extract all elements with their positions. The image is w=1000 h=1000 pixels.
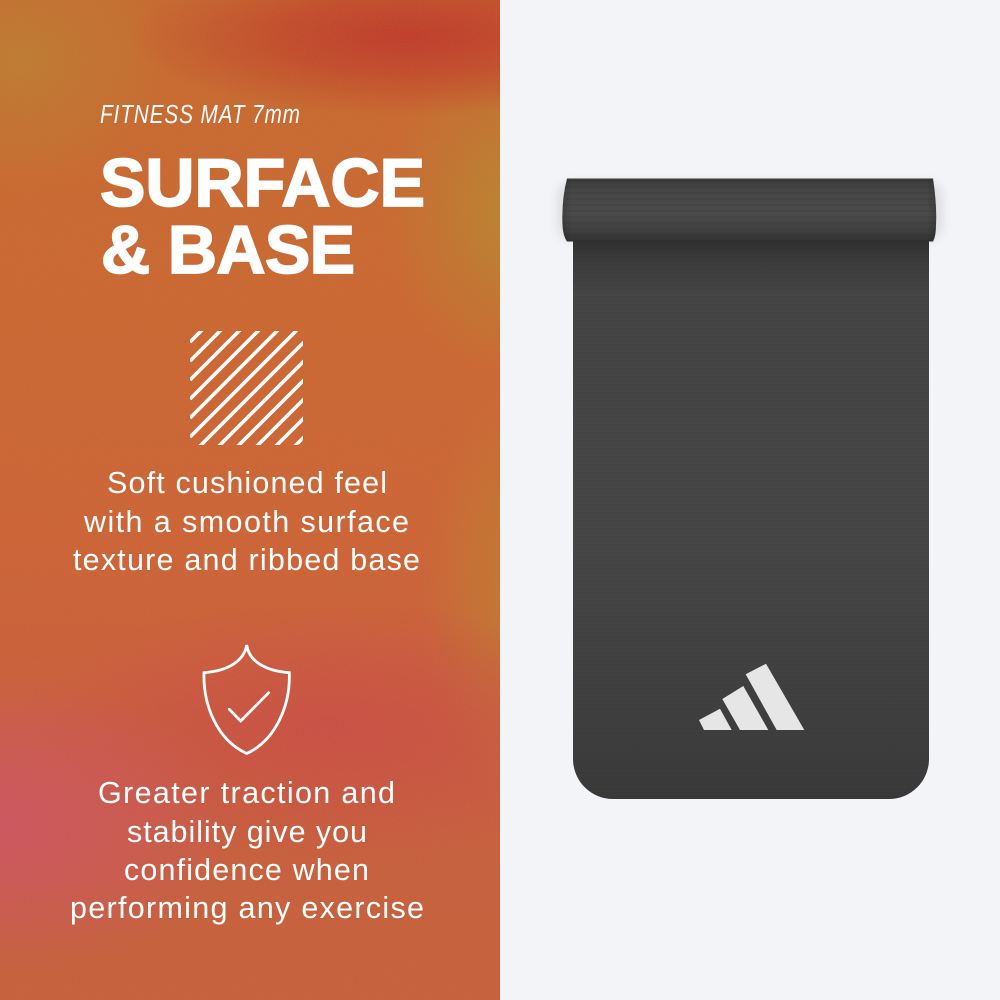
icon: diagonal stripes texture	[190, 331, 303, 445]
mat body	[573, 240, 929, 799]
text block: traction and stability: performing any exercise	[70, 891, 424, 925]
mat shadow	[558, 182, 942, 240]
icon: shield with check	[204, 645, 289, 754]
text block: traction and stability: stability give you	[127, 815, 367, 849]
heading: & BASE	[101, 212, 355, 288]
text block: traction and stability: Greater traction and	[98, 776, 395, 810]
text block: cushioned feel: with a smooth surface	[83, 505, 409, 539]
panel: grain texture	[0, 0, 500, 1000]
panel: gradient background	[0, 0, 500, 1000]
heading	[100, 145, 425, 288]
subtitle: FITNESS MAT 7mm	[100, 100, 300, 129]
logo: three bars	[699, 664, 804, 730]
text block: traction and stability: confidence when	[124, 853, 369, 887]
mat roll	[562, 178, 936, 242]
heading: SURFACE	[100, 145, 425, 221]
text block: traction and stability	[70, 776, 424, 925]
text block: cushioned feel: texture and ribbed base	[73, 543, 420, 577]
text block: cushioned feel: Soft cushioned feel	[107, 466, 387, 500]
panel: yoga mat	[558, 178, 942, 799]
text block: cushioned feel	[73, 466, 420, 577]
